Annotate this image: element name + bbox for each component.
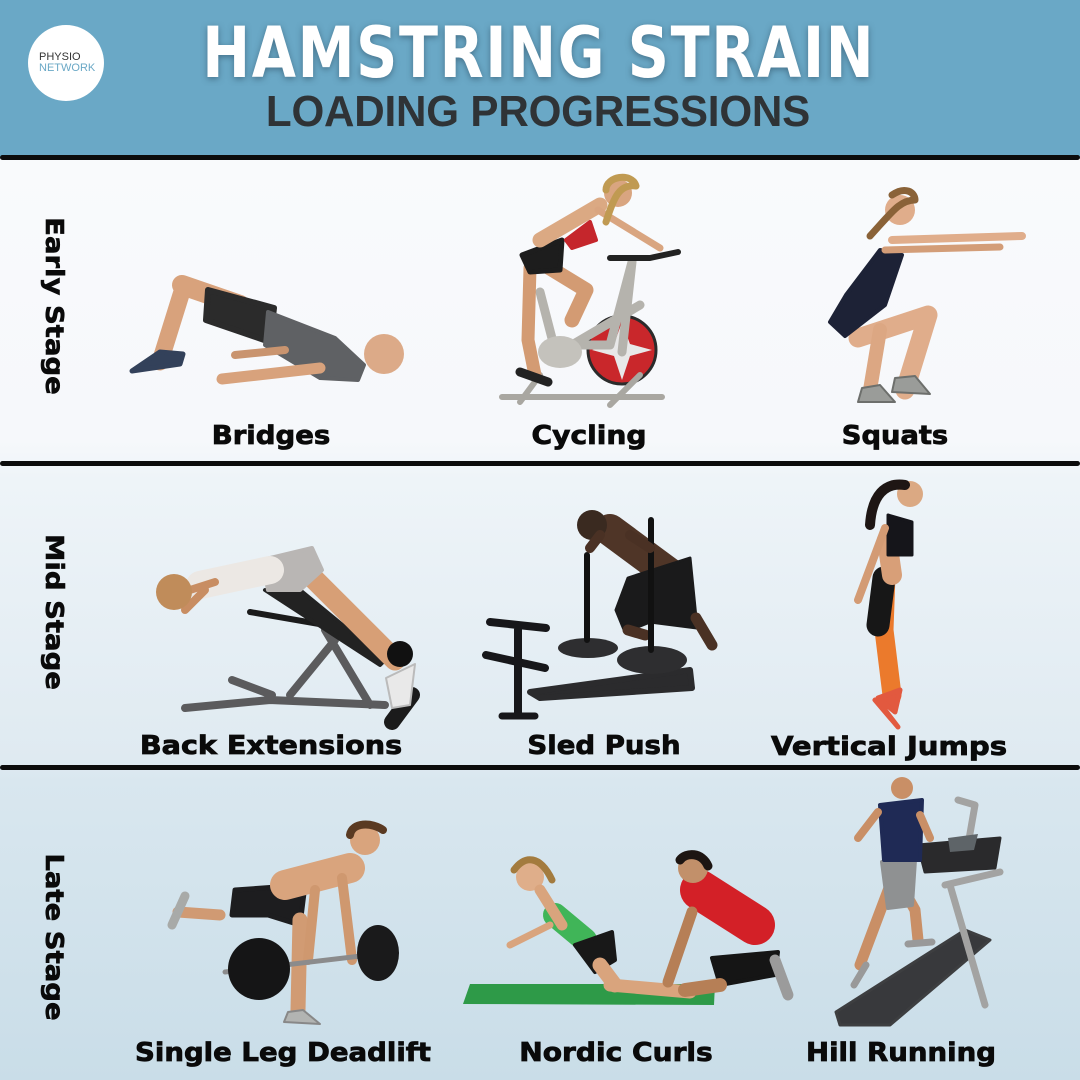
figure: sled push — [486, 510, 712, 716]
label: hill running: Hill Running — [806, 1038, 996, 1068]
logo: Physio Network — [28, 25, 104, 101]
logo: Physio Network: PHYSIO — [39, 51, 81, 63]
header band — [0, 0, 1080, 157]
label: squats: Squats — [842, 421, 948, 451]
label: cycling: Cycling — [532, 421, 646, 451]
figure: squats — [830, 191, 1022, 402]
subtitle: LOADING PROGRESSIONS — [266, 87, 810, 136]
label: single leg deadlift: Single Leg Deadlift — [135, 1038, 431, 1068]
label: sled push: Sled Push — [527, 731, 681, 761]
label: vertical jumps: Vertical Jumps — [771, 732, 1007, 762]
stage label: late: Late Stage — [40, 853, 69, 1021]
figure: vertical jumps — [858, 481, 923, 727]
stage label: mid: Mid Stage — [40, 534, 69, 690]
title: HAMSTRING STRAIN — [202, 12, 875, 94]
figure: cycling — [502, 177, 678, 405]
stage label: early: Early Stage — [40, 217, 69, 395]
figure: bridges — [132, 285, 404, 380]
figure: nordic curls — [463, 853, 788, 1005]
figure: single leg deadlift — [172, 825, 399, 1024]
label: bridges: Bridges — [212, 421, 330, 451]
label: nordic curls: Nordic Curls — [519, 1038, 713, 1068]
logo: Physio Network: NETWORK — [39, 62, 95, 74]
figure: back extensions — [156, 548, 415, 722]
label: back extensions: Back Extensions — [140, 731, 402, 761]
figure: hill running — [836, 777, 1000, 1025]
